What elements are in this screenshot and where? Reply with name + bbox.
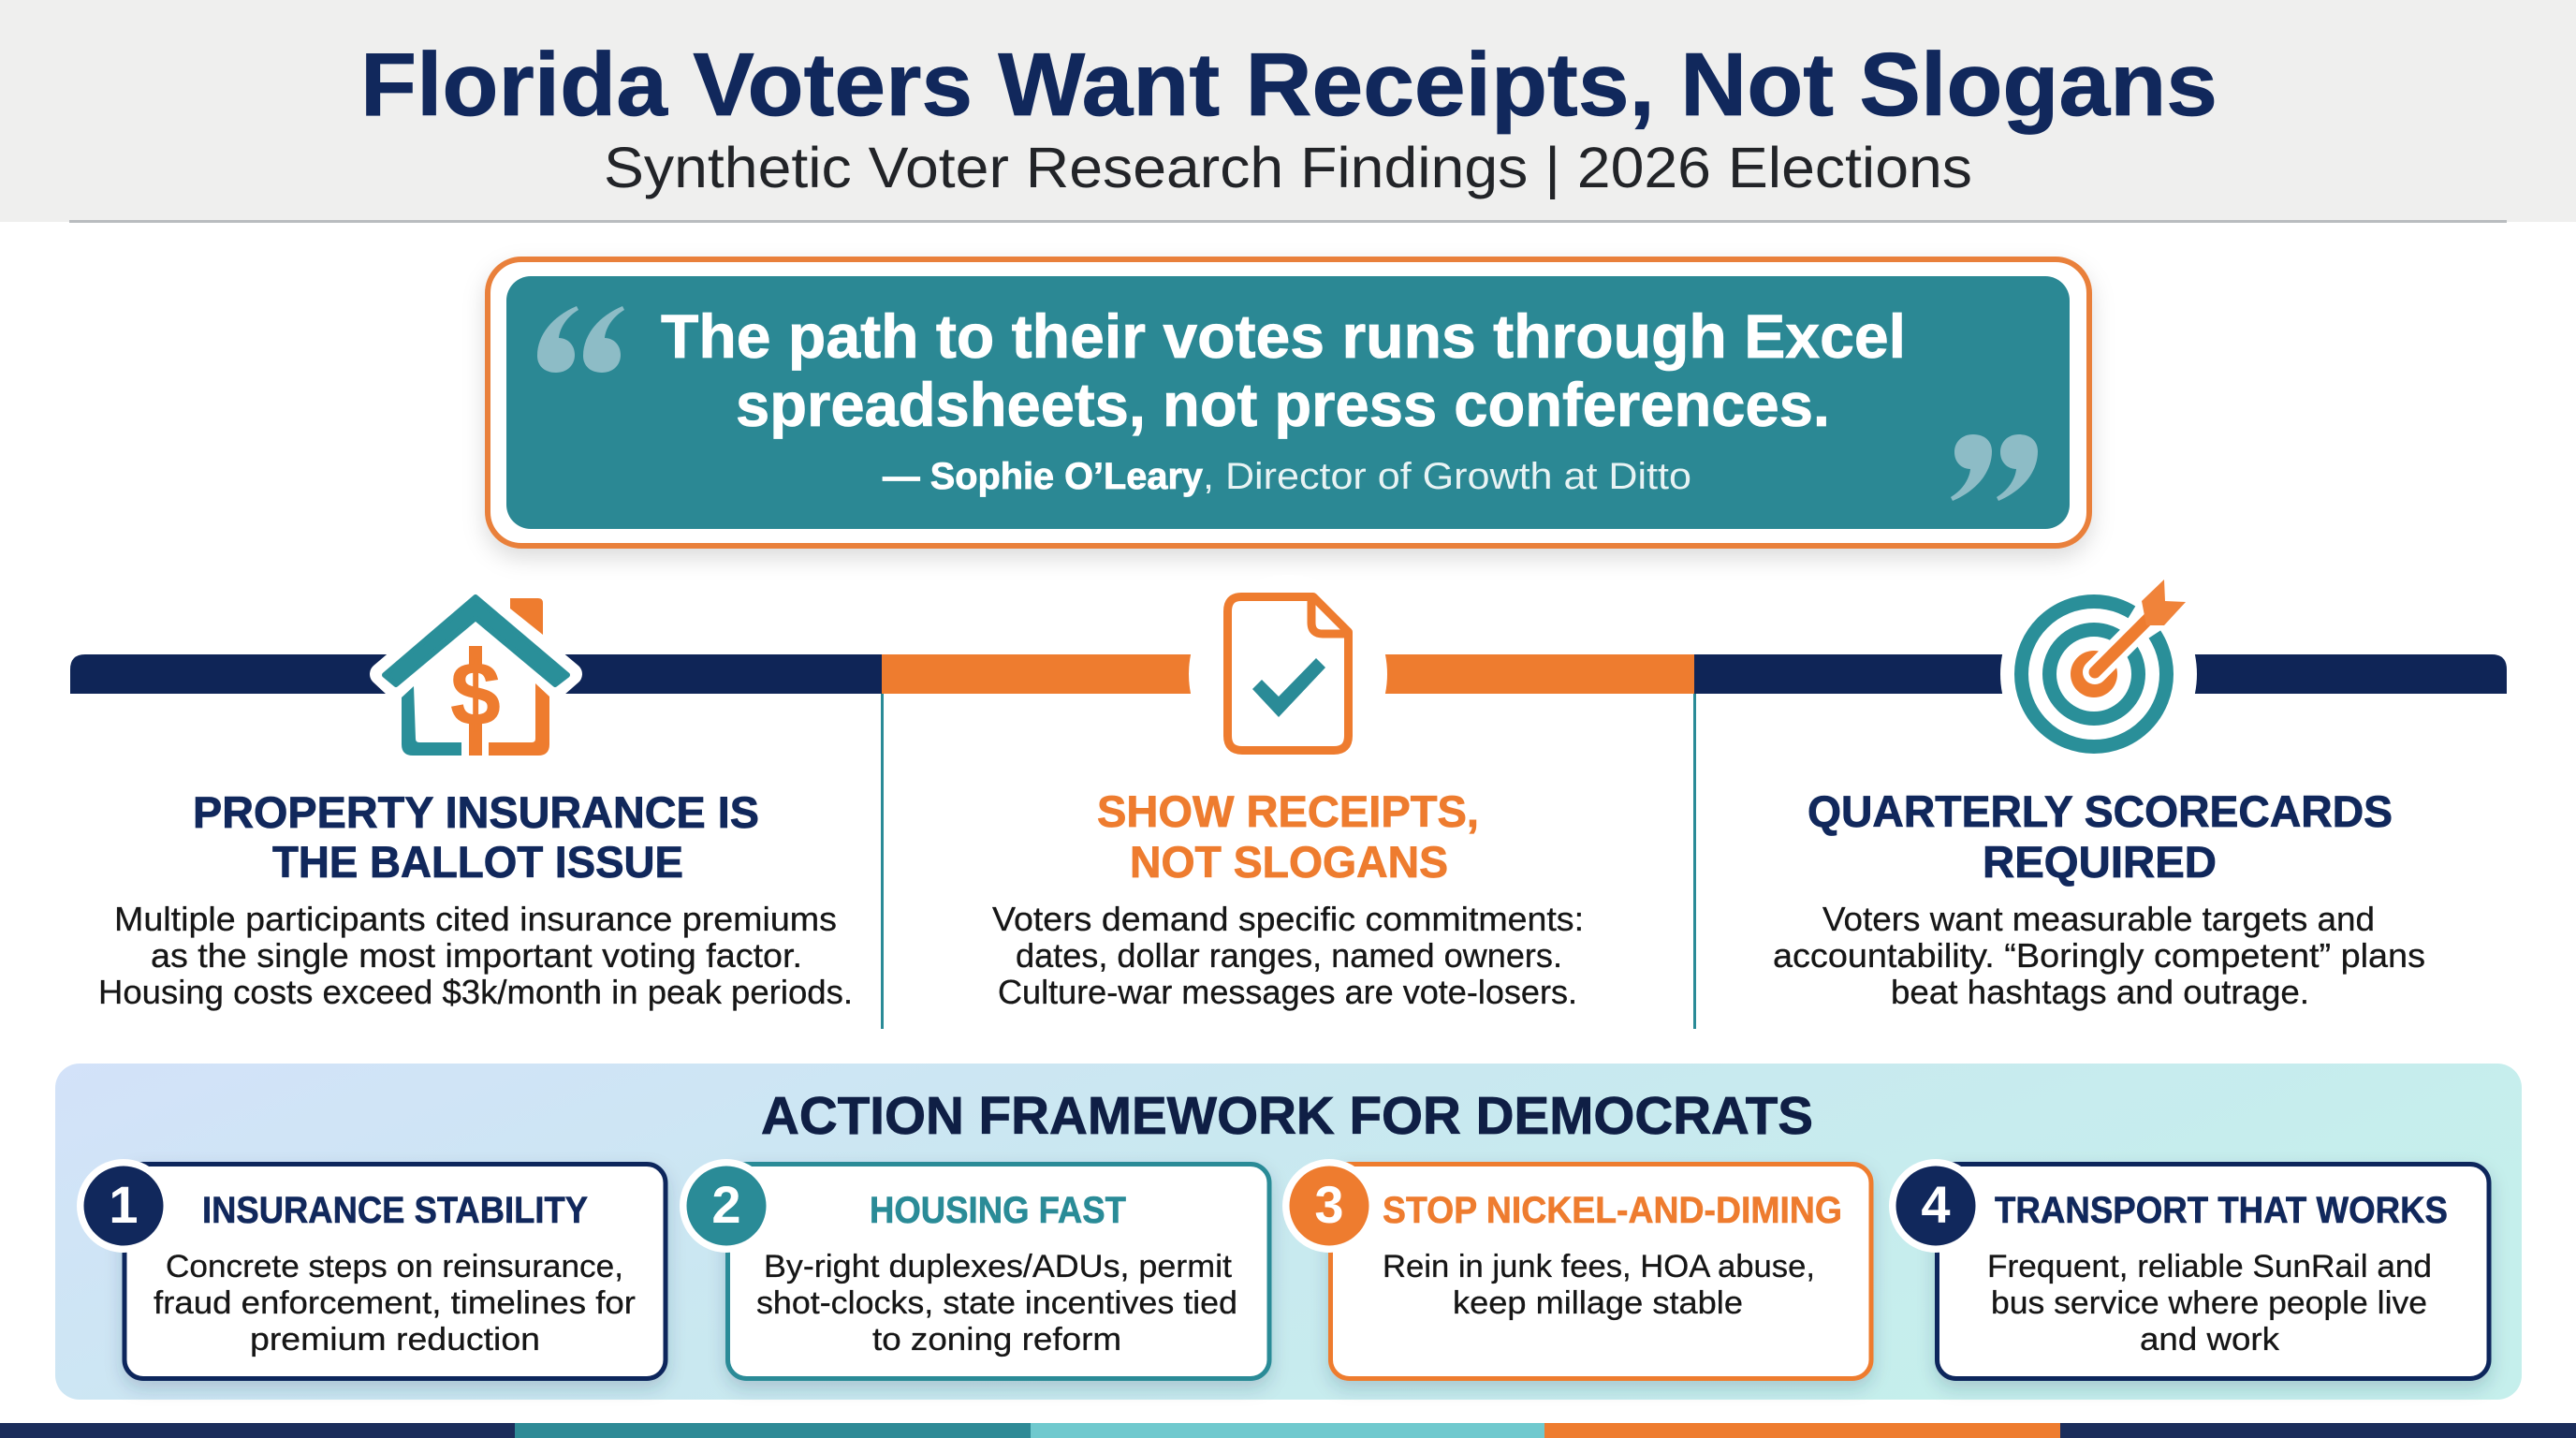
title: Florida Voters Want Receipts, Not Slogans: [360, 35, 2217, 135]
body text: dates, dollar ranges, named owners.: [1016, 936, 1562, 975]
card 2: housing fast: [680, 1159, 1269, 1378]
card text: [154, 1249, 636, 1357]
attribution: , Director of Growth at Ditto: [1203, 456, 1691, 497]
icon: target with arrow: [2000, 576, 2197, 772]
card text: Frequent, reliable SunRail and: [1987, 1249, 2432, 1284]
heading: QUARTERLY SCORECARDS: [1808, 786, 2393, 836]
card 4: transport that works: [1889, 1159, 2489, 1378]
header band: [0, 0, 2576, 223]
card title: HOUSING FAST: [870, 1190, 1126, 1231]
body text: Voters demand specific commitments:: [992, 900, 1584, 938]
card text: and work: [2140, 1322, 2280, 1357]
card text: By-right duplexes/ADUs, permit: [764, 1249, 1233, 1284]
attribution: — Sophie O’Leary: [883, 456, 1204, 497]
badge 1: 1: [109, 1175, 139, 1234]
body text: Multiple participants cited insurance premiums: [114, 900, 837, 938]
badge 1: [77, 1159, 170, 1253]
card 3: stop nickel-and-diming: [1282, 1159, 1871, 1378]
card text: [756, 1249, 1237, 1357]
heading: [1097, 786, 1479, 887]
badge 3: [1282, 1159, 1376, 1253]
card 1: insurance stability: [77, 1159, 666, 1378]
card text: [1987, 1249, 2432, 1357]
badge 2: 2: [711, 1175, 741, 1234]
heading: THE BALLOT ISSUE: [272, 837, 683, 887]
badge 4: [1889, 1159, 1983, 1253]
card text: Rein in junk fees, HOA abuse,: [1383, 1249, 1815, 1284]
card title: TRANSPORT THAT WORKS: [1995, 1190, 2448, 1231]
body text: [98, 900, 853, 1011]
card text: keep millage stable: [1453, 1285, 1743, 1321]
badge 2: [680, 1159, 773, 1253]
body text: Culture-war messages are vote-losers.: [998, 973, 1577, 1011]
section header bar: [70, 654, 2507, 1029]
body text: [1773, 900, 2425, 1011]
icon: house with dollar sign: [381, 594, 571, 756]
body text: [992, 900, 1584, 1011]
body text: Housing costs exceed $3k/month in peak periods.: [98, 973, 853, 1011]
quote text: spreadsheets, not press conferences.: [736, 370, 1830, 439]
body text: accountability. “Boringly competent” plans: [1773, 936, 2425, 975]
card text: fraud enforcement, timelines for: [154, 1285, 636, 1321]
card text: premium reduction: [250, 1322, 540, 1357]
icon: house with dollar sign: $: [450, 644, 501, 744]
body text: as the single most important voting factor.: [151, 936, 802, 975]
heading: PROPERTY INSURANCE IS: [193, 787, 759, 837]
card text: shot-clocks, state incentives tied: [756, 1285, 1237, 1321]
heading: NOT SLOGANS: [1130, 837, 1448, 887]
body text: beat hashtags and outrage.: [1891, 973, 2309, 1011]
footer colour strip: [0, 1423, 2576, 1438]
panel: property insurance: [98, 594, 853, 1011]
panel: quarterly scorecards: [1773, 576, 2425, 1011]
body text: Voters want measurable targets and: [1822, 900, 2375, 938]
heading: [1808, 786, 2393, 887]
badge 3: 3: [1314, 1175, 1344, 1234]
card title: STOP NICKEL-AND-DIMING: [1383, 1190, 1842, 1231]
card title: INSURANCE STABILITY: [202, 1190, 588, 1231]
icon: closing quote mark: [1951, 434, 2038, 501]
card text: [1383, 1249, 1815, 1321]
heading: ACTION FRAMEWORK FOR DEMOCRATS: [761, 1086, 1813, 1146]
panel: show receipts: [992, 575, 1584, 1011]
subtitle: Synthetic Voter Research Findings | 2026 Elections: [604, 136, 1972, 199]
heading: [193, 787, 759, 887]
quote text: [661, 301, 1906, 439]
card text: Concrete steps on reinsurance,: [166, 1249, 623, 1284]
icon: opening quote mark: [537, 306, 624, 373]
heading: REQUIRED: [1983, 837, 2217, 887]
quote text: The path to their votes runs through Excel: [661, 301, 1906, 371]
heading: SHOW RECEIPTS,: [1097, 786, 1479, 836]
quote callout: [488, 259, 2089, 546]
panel: action framework: [55, 1064, 2522, 1400]
badge 4: 4: [1921, 1175, 1951, 1234]
attribution: [883, 456, 1691, 497]
card text: bus service where people live: [1991, 1285, 2427, 1321]
icon: document with checkmark: [1189, 575, 1387, 773]
card text: to zoning reform: [872, 1322, 1121, 1357]
